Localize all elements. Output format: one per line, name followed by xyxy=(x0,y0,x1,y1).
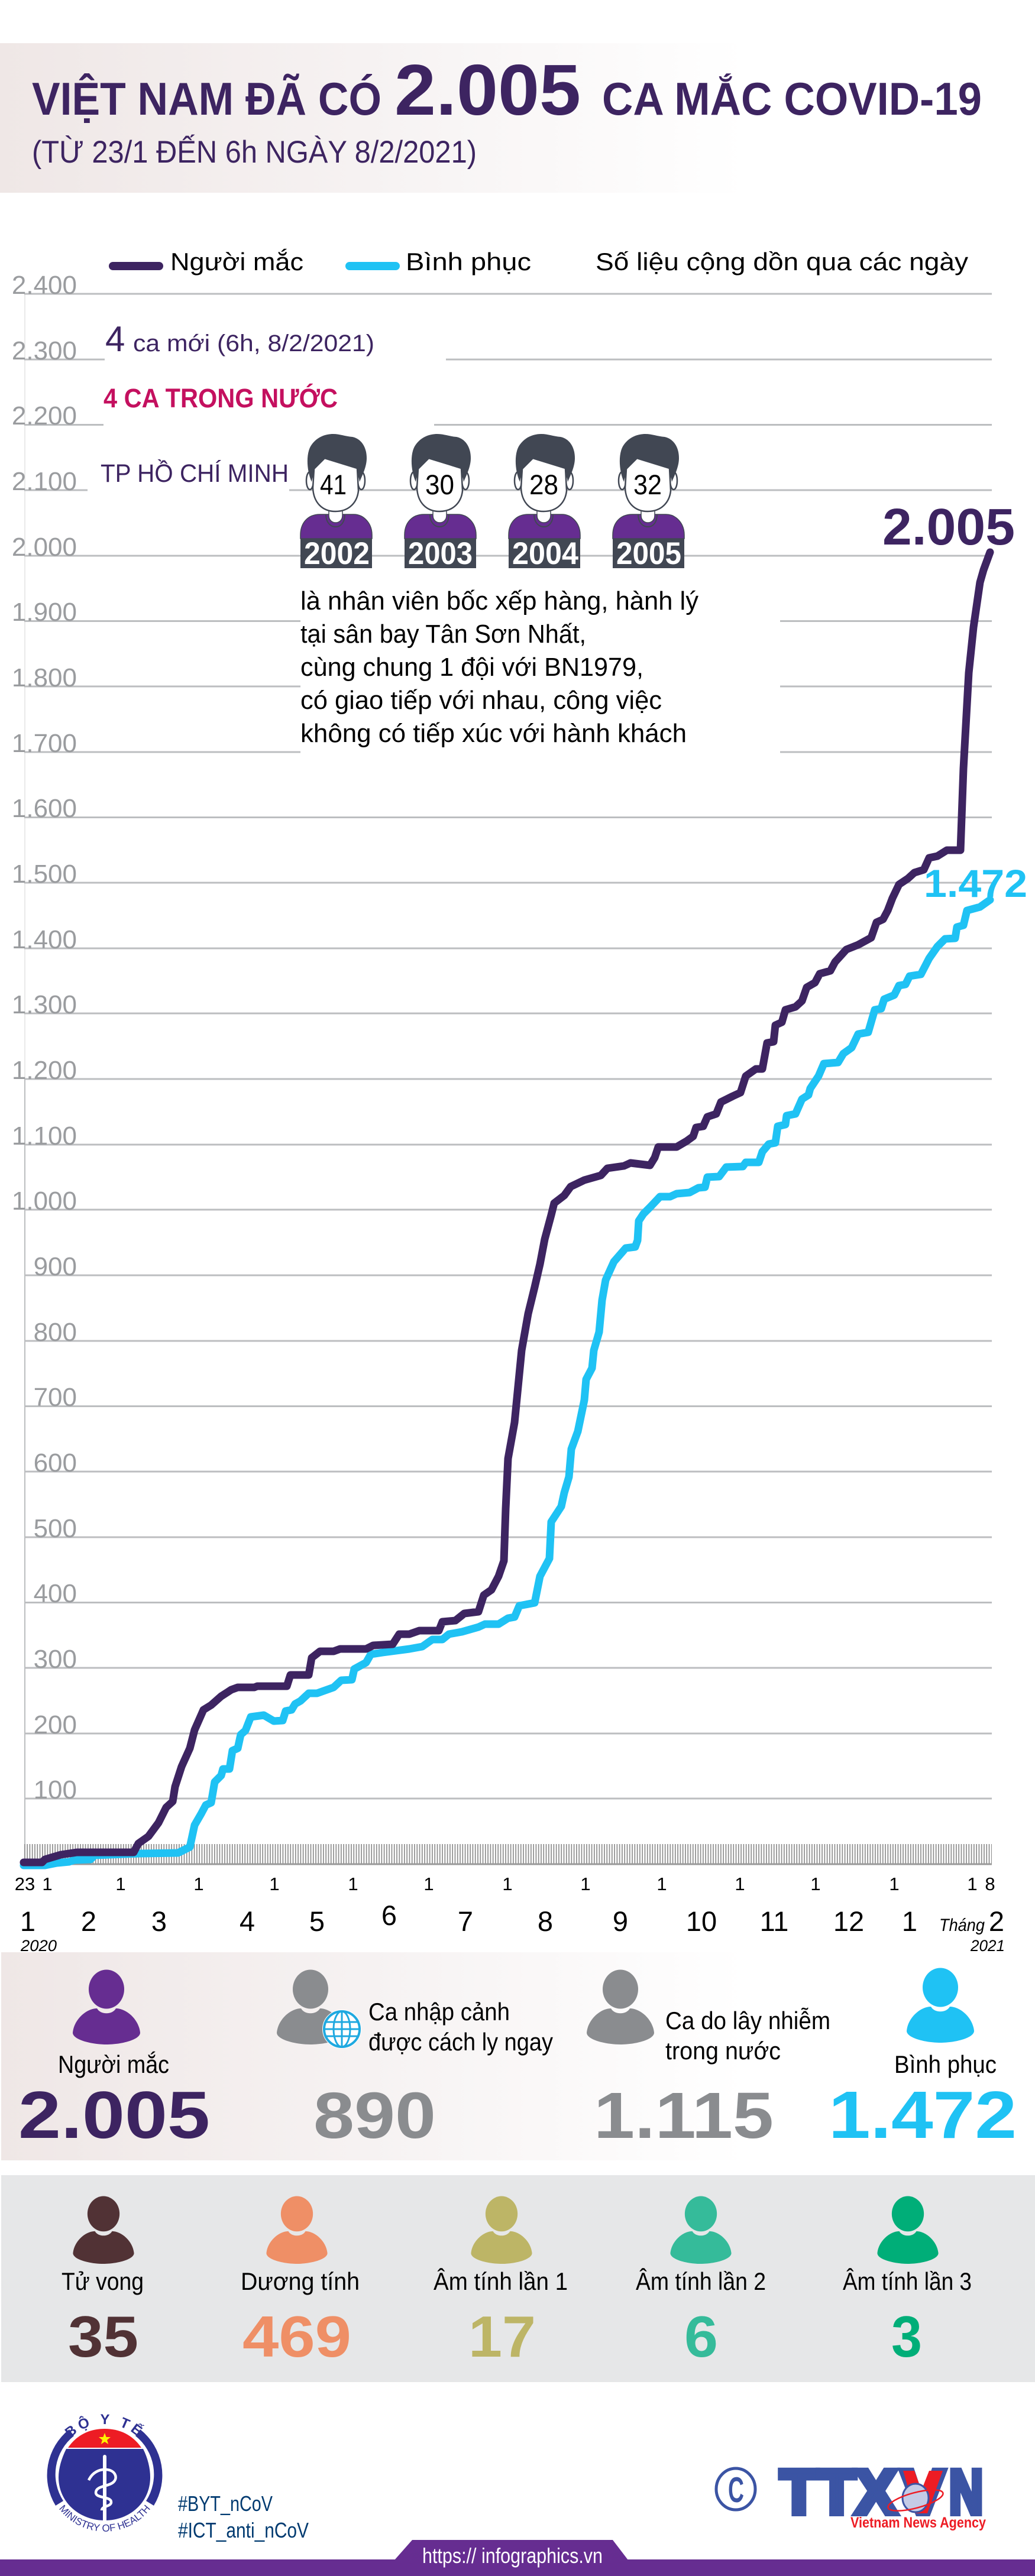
day labels: 1 xyxy=(656,1874,667,1894)
logo: Ministry of Health xyxy=(47,2414,162,2532)
month labels: 7 xyxy=(458,1906,473,1937)
daily tick band xyxy=(24,1844,992,1864)
y axis labels: 400 xyxy=(34,1579,77,1608)
y axis labels: 2.300 xyxy=(12,336,77,365)
callout: new cases xyxy=(101,319,698,748)
month labels: 6 xyxy=(381,1900,397,1931)
stat: deaths: 35 xyxy=(68,2304,138,2369)
day labels: 1 xyxy=(348,1874,358,1894)
panel: totals xyxy=(1,1952,1035,2160)
y axis labels: 1.800 xyxy=(12,663,77,692)
stat: domestic xyxy=(587,1970,830,2152)
patient 2003 xyxy=(405,434,476,571)
patient 2002: 41 xyxy=(320,469,347,500)
title xyxy=(32,50,982,130)
stat: domestic: Ca do lây nhiễm xyxy=(665,2007,830,2034)
month labels: 2 xyxy=(989,1906,1004,1937)
legend: Bình phục xyxy=(406,248,531,276)
y axis labels: 700 xyxy=(34,1383,77,1412)
logo: TTXVN: N xyxy=(949,2458,983,2527)
day labels: 1 xyxy=(269,1874,280,1894)
y axis labels: 1.600 xyxy=(12,794,77,823)
y axis labels: 1.000 xyxy=(12,1187,77,1216)
y axis labels: 600 xyxy=(34,1449,77,1477)
day labels: 23 xyxy=(15,1874,35,1894)
month labels: 5 xyxy=(309,1906,325,1937)
logo: Ministry of Health: MINISTRY OF HEALTH xyxy=(59,2504,150,2532)
stat: negative once: Âm tính lần 1 xyxy=(434,2267,568,2295)
patient description: tại sân bay Tân Sơn Nhất, xyxy=(300,620,586,649)
icon: globe xyxy=(323,2010,361,2048)
y axis labels: 2.100 xyxy=(12,467,77,496)
patient 2004: 2004 xyxy=(512,536,578,571)
month labels: 2020 xyxy=(20,1937,57,1955)
stat: imported: Ca nhập cảnh xyxy=(368,1998,510,2026)
y axis labels: 900 xyxy=(34,1252,77,1281)
stat: positive: 469 xyxy=(242,2304,351,2369)
month labels: 12 xyxy=(833,1906,864,1937)
stat: negative twice: Âm tính lần 2 xyxy=(636,2267,766,2295)
legend: Số liệu cộng dồn qua các ngày xyxy=(596,248,968,276)
stat: cases: 2.005 xyxy=(18,2078,210,2152)
month labels xyxy=(20,1900,1005,1955)
hashtags: #ICT_anti_nCoV xyxy=(178,2518,309,2542)
y axis labels: 2.200 xyxy=(12,401,77,430)
y axis labels: 1.300 xyxy=(12,990,77,1019)
stat: negative once: 17 xyxy=(468,2304,536,2369)
stat: recovered xyxy=(829,1968,1017,2152)
stat: domestic: trong nước xyxy=(665,2037,781,2065)
month labels: 1 xyxy=(20,1906,35,1937)
y axis labels: 1.900 xyxy=(12,598,77,627)
legend xyxy=(109,248,968,276)
cases curve xyxy=(24,552,990,1862)
patient description: có giao tiếp với nhau, công việc xyxy=(300,686,662,715)
day labels: 1 xyxy=(810,1874,821,1894)
day labels: 1 xyxy=(502,1874,513,1894)
stat: negative three times xyxy=(843,2196,972,2369)
patient description: cùng chung 1 đội với BN1979, xyxy=(300,653,643,682)
logo: TTXVN: TTX xyxy=(780,2458,897,2527)
title: 2.005 xyxy=(394,50,581,130)
patient 2005 xyxy=(613,434,684,571)
patient 2003: 2003 xyxy=(408,536,473,571)
new case count xyxy=(105,319,374,359)
day labels: 1 xyxy=(967,1874,978,1894)
day labels: 1 xyxy=(42,1874,53,1894)
line chart xyxy=(12,271,1027,1955)
stat: positive: Dương tính xyxy=(241,2267,360,2295)
month labels: 11 xyxy=(760,1906,788,1937)
patient 2002 xyxy=(300,434,372,571)
day labels: 1 xyxy=(193,1874,204,1894)
y axis labels: 2.000 xyxy=(12,533,77,562)
new case count: ca mới (6h, 8/2/2021) xyxy=(133,330,374,357)
legend: Người mắc xyxy=(170,248,303,276)
month labels: 2 xyxy=(81,1906,96,1937)
logo: TTXVN: V xyxy=(901,2458,945,2527)
y axis labels: 1.400 xyxy=(12,925,77,954)
y axis labels: 800 xyxy=(34,1318,77,1347)
hashtags: #BYT_nCoV xyxy=(178,2491,273,2516)
y axis labels: 1.500 xyxy=(12,860,77,889)
y axis line xyxy=(24,294,25,1079)
patient 2005: 32 xyxy=(633,469,662,500)
stat: domestic: 1.115 xyxy=(594,2079,774,2152)
logo: TTXVN: Vietnam News Agency xyxy=(850,2515,986,2531)
day labels xyxy=(15,1874,995,1894)
stat: deaths xyxy=(62,2196,144,2369)
header band xyxy=(0,43,1035,193)
y axis labels: 1.200 xyxy=(12,1056,77,1085)
location: TP HỒ CHÍ MINH xyxy=(101,459,289,488)
stat: recovered: Bình phục xyxy=(894,2050,997,2078)
footer bar xyxy=(0,2540,1035,2576)
stat: deaths: Tử vong xyxy=(62,2267,144,2295)
patient 2005: 2005 xyxy=(616,536,681,571)
stat: imported xyxy=(277,1970,553,2152)
month labels: 10 xyxy=(686,1906,717,1937)
day labels: 1 xyxy=(735,1874,745,1894)
logo: TTXVN: C xyxy=(728,2470,744,2510)
title: CA MẮC COVID-19 xyxy=(602,73,982,125)
new case count: 4 xyxy=(105,319,125,359)
domestic heading: 4 CA TRONG NƯỚC xyxy=(104,383,338,413)
y axis labels: 100 xyxy=(34,1775,77,1804)
month labels: 2021 xyxy=(970,1937,1005,1955)
patient description: không có tiếp xúc với hành khách xyxy=(300,719,687,748)
panel: patient status xyxy=(1,2175,1035,2382)
month labels: 9 xyxy=(613,1906,628,1937)
end value: recovered: 1.472 xyxy=(924,861,1027,905)
y axis labels: 2.400 xyxy=(12,271,77,300)
patient 2002: 2002 xyxy=(304,536,370,571)
y axis labels: 1.100 xyxy=(12,1122,77,1151)
stat: positive xyxy=(241,2196,360,2369)
stat: negative twice: 6 xyxy=(684,2304,718,2369)
day labels: 8 xyxy=(985,1874,995,1894)
stat: negative once xyxy=(434,2196,568,2369)
day labels: 1 xyxy=(115,1874,126,1894)
y axis labels xyxy=(12,271,77,1804)
patient description xyxy=(300,587,698,748)
patient 2003: 30 xyxy=(425,469,454,500)
month labels: 4 xyxy=(240,1906,255,1937)
stat: cases: Người mắc xyxy=(58,2050,169,2078)
y axis labels: 200 xyxy=(34,1710,77,1739)
subtitle: (TỪ 23/1 ĐẾN 6h NGÀY 8/2/2021) xyxy=(32,134,477,170)
stat: negative twice xyxy=(636,2196,766,2369)
stat: imported: được cách ly ngay xyxy=(368,2028,553,2056)
patient 2004 xyxy=(509,434,580,571)
month labels: Tháng xyxy=(939,1916,985,1935)
stat: recovered: 1.472 xyxy=(829,2078,1017,2152)
end value: cases: 2.005 xyxy=(882,498,1015,556)
day labels: 1 xyxy=(889,1874,900,1894)
y axis labels: 500 xyxy=(34,1514,77,1543)
logo: TTXVN xyxy=(716,2458,986,2531)
month labels: 1 xyxy=(902,1906,917,1937)
stat: negative three times: 3 xyxy=(891,2304,922,2369)
hashtags xyxy=(178,2491,309,2542)
footer bar: https:// infographics.vn xyxy=(422,2543,603,2568)
recovered curve xyxy=(24,900,990,1865)
patient description: là nhân viên bốc xếp hàng, hành lý xyxy=(300,587,698,615)
y axis labels: 300 xyxy=(34,1645,77,1674)
day labels: 1 xyxy=(423,1874,434,1894)
title: VIỆT NAM ĐÃ CÓ xyxy=(32,73,381,125)
month labels: 8 xyxy=(538,1906,553,1937)
logo: Ministry of Health: BỘ Y TẾ xyxy=(64,2414,144,2435)
stat: imported: 890 xyxy=(313,2079,436,2152)
stat: negative three times: Âm tính lần 3 xyxy=(843,2267,972,2295)
day labels: 1 xyxy=(580,1874,591,1894)
stat: cases xyxy=(18,1970,210,2152)
y axis labels: 1.700 xyxy=(12,729,77,758)
patient 2004: 28 xyxy=(529,469,558,500)
month labels: 3 xyxy=(151,1906,167,1937)
